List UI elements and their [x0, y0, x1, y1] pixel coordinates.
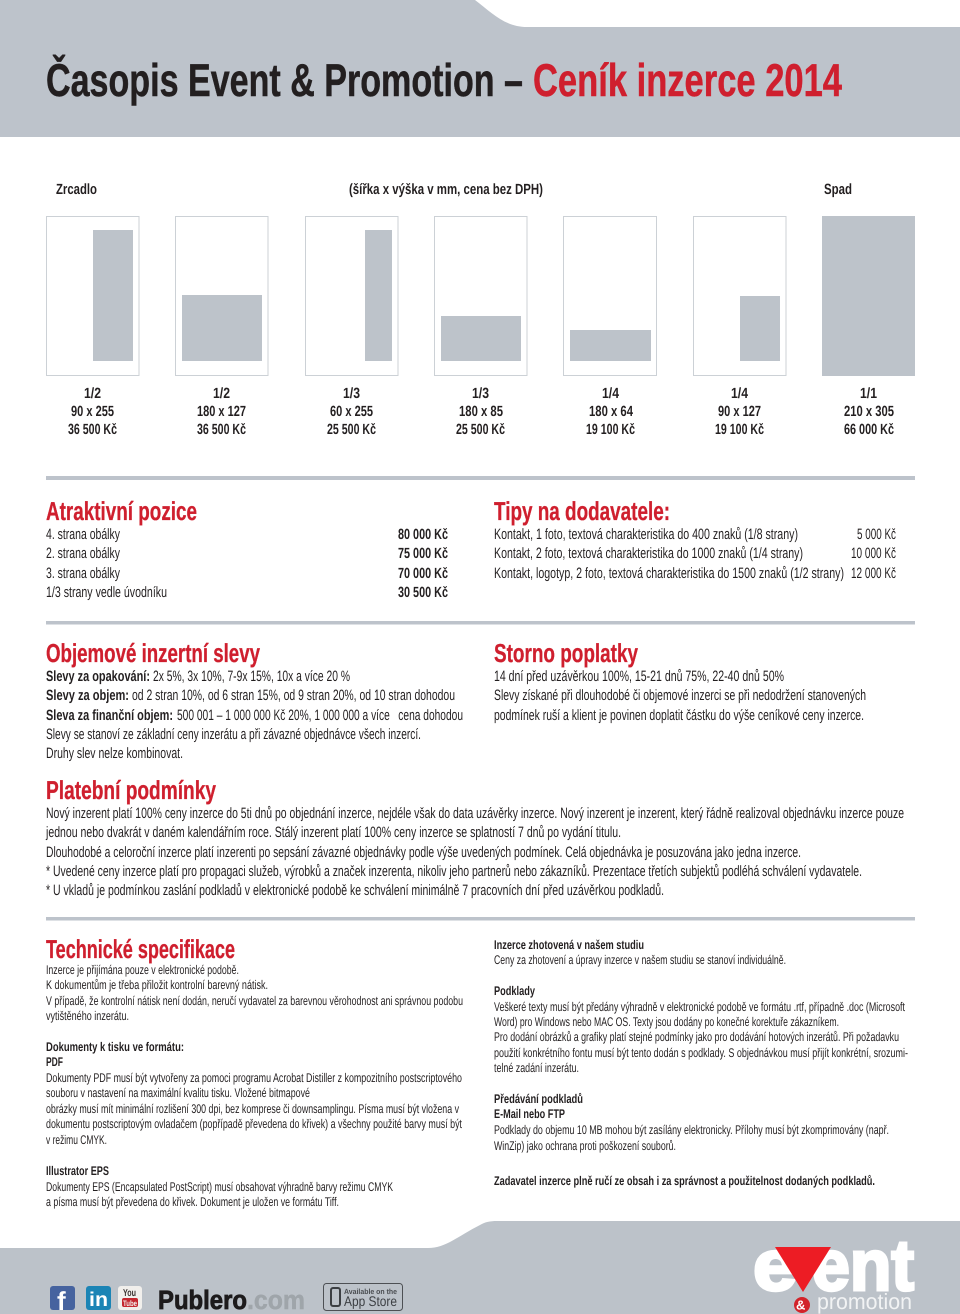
ad format 1/2 180x127 — [176, 216, 268, 438]
ad format 1/4 180x64: 180 x 64 — [589, 404, 634, 420]
logo: event & promotion — [753, 1226, 914, 1314]
panel: studio and materials — [494, 938, 908, 1188]
panel: technical specifications: v režimu CMYK. — [46, 1133, 107, 1147]
panel: studio and materials: WinZip) jako ochrana proti poškození souborů. — [494, 1139, 676, 1153]
logo: event & promotion: promotion — [817, 1289, 912, 1314]
panel: supplier tips: 5 000 Kč — [857, 526, 896, 543]
ad format 1/4 90x127: 90 x 127 — [718, 404, 761, 420]
panel: payment terms: Platební podmínky — [46, 775, 216, 805]
panel: payment terms — [45, 775, 904, 899]
icon: youtube — [118, 1286, 142, 1310]
panel: supplier tips: Kontakt, 1 foto, textová charakteristika do 400 znaků (1/8 strany) — [494, 526, 798, 543]
badge: App Store — [324, 1284, 402, 1310]
panel: technical specifications: Inzerce je přijímána pouze v elektronické podobě. — [46, 963, 239, 977]
panel: attractive positions: 1/3 strany vedle úvodníku — [46, 584, 167, 601]
ad format 1/2 90x255: 1/2 — [84, 386, 101, 402]
panel: supplier tips — [494, 496, 896, 582]
ad format 1/3 60x255: 1/3 — [343, 386, 360, 402]
ad format 1/3 180x85: 1/3 — [472, 386, 489, 402]
panel: technical specifications: K dokumentům je třeba přiložit kontrolní barevný nátisk. — [46, 978, 268, 992]
panel: technical specifications: V případě, že kontrolní nátisk není dodán, neručí vydavatel za barevnou věrohodnost ani správnou podobu — [46, 994, 463, 1008]
panel: technical specifications: Dokumenty EPS (Encapsulated PostScript) musí obsahovat výhradně barvy režimu CMYK — [46, 1180, 393, 1194]
ad format 1/3 60x255: 25 500 Kč — [327, 422, 376, 438]
ad format 1/1 210x305: 66 000 Kč — [844, 422, 894, 438]
panel: attractive positions: 3. strana obálky — [46, 565, 120, 582]
panel: studio and materials: Podklady — [494, 984, 535, 998]
panel: technical specifications: dokumentu postscriptovým ovladačem (popřípadě převedena do křivek) a všechny použité barvy musí být — [46, 1117, 462, 1131]
ad format 1/2 180x127: 36 500 Kč — [197, 422, 246, 438]
panel: supplier tips: Tipy na dodavatele: — [494, 496, 670, 526]
panel: volume discounts: Druhy slev nelze kombinovat. — [46, 745, 183, 762]
ad format 1/4 180x64 — [564, 216, 656, 438]
panel: volume discounts: Objemové inzertní slevy — [46, 638, 260, 668]
panel: volume discounts: 2x 5%, 3x 10%, 7-9x 15%, 10x a více 20 % — [153, 668, 350, 685]
panel: volume discounts: 500 001 – 1 000 000 Kč 20%, 1 000 000 a více cena dohodou — [177, 707, 463, 724]
panel: technical specifications: Dokumenty PDF musí být vytvořeny za pomoci programu Acrobat Distiller z kompozitního postscriptového — [46, 1071, 462, 1085]
column captions — [56, 182, 852, 198]
title: Ceník inzerce 2014 — [533, 54, 842, 106]
panel: attractive positions: 30 500 Kč — [398, 585, 448, 601]
badge: App Store: Available on the — [344, 1287, 397, 1296]
ad format 1/2 180x127: 1/2 — [213, 386, 230, 402]
ad format 1/3 180x85: 25 500 Kč — [456, 422, 505, 438]
panel: payment terms: * U vkladů je podmínkou zaslání podkladů v elektronické podobě ke schválení minimálně 7 pracovních dní před uzávěrkou podkladů. — [46, 882, 664, 899]
panel: attractive positions: Atraktivní pozice — [46, 496, 197, 526]
ad format 1/3 60x255 — [306, 216, 398, 438]
panel: supplier tips: 12 000 Kč — [851, 565, 896, 582]
panel: attractive positions: 2. strana obálky — [46, 545, 120, 562]
ad format 1/4 90x127: 1/4 — [731, 386, 749, 402]
ad format 1/1 210x305: 1/1 — [860, 386, 877, 402]
title: Časopis Event & Promotion – — [46, 54, 523, 106]
panel: volume discounts: Sleva za finanční objem: — [46, 708, 173, 724]
panel: volume discounts: Slevy za opakování: — [46, 669, 150, 685]
panel: technical specifications: Technické specifikace — [46, 934, 235, 964]
icon: linkedin — [86, 1286, 111, 1311]
panel: technical specifications: obrázky musí mít minimální rozlišení 300 dpi, bez komprese či downsamplingu. Písma musí být vložena v — [46, 1102, 459, 1116]
panel: volume discounts — [46, 638, 463, 762]
logo: Publero.com — [158, 1285, 305, 1314]
ad format 1/2 90x255: 90 x 255 — [71, 404, 114, 420]
column captions: Spad — [824, 182, 852, 198]
ad format 1/3 180x85: 180 x 85 — [459, 404, 503, 420]
ad format 1/3 60x255: 60 x 255 — [330, 404, 373, 420]
panel: technical specifications: a písma musí být převedena do křivek. Dokument je uložen ve formátu Tiff. — [46, 1195, 339, 1209]
panel: volume discounts: od 2 stran 10%, od 6 stran 15%, od 9 stran 20%, od 10 stran dohodou — [132, 687, 455, 704]
icon: linkedin: in — [89, 1289, 108, 1311]
panel: attractive positions: 75 000 Kč — [398, 546, 448, 562]
panel: attractive positions — [46, 496, 448, 601]
panel: studio and materials: Ceny za zhotovení a úpravy inzerce v našem studiu se stanoví individuálně. — [494, 953, 786, 967]
ad format 1/1 210x305 — [822, 216, 915, 438]
logo: event & promotion: e — [753, 1226, 797, 1306]
panel: technical specifications: vytištěného inzerátu. — [46, 1009, 129, 1023]
panel: technical specifications: Illustrator EPS — [46, 1164, 109, 1178]
panel: studio and materials: telné zadání inzerátu. — [494, 1061, 579, 1075]
ad format 1/4 180x64: 19 100 Kč — [586, 422, 635, 438]
panel: studio and materials: Předávání podkladů — [494, 1092, 583, 1106]
icon: youtube: Tube — [123, 1299, 137, 1308]
icon: youtube: You — [123, 1288, 136, 1299]
column captions: (šířka x výška v mm, cena bez DPH) — [349, 182, 543, 198]
ad format 1/3 180x85 — [434, 216, 527, 438]
panel: supplier tips: Kontakt, 2 foto, textová charakteristika do 1000 znaků (1/4 strany) — [494, 545, 803, 562]
panel: studio and materials: E-Mail nebo FTP — [494, 1107, 565, 1121]
ad format 1/2 180x127: 180 x 127 — [197, 404, 246, 420]
panel: technical specifications: Dokumenty k tisku ve formátu: — [46, 1040, 184, 1054]
panel: payment terms: jednou nebo dvakrát v daném kalendářním roce. Stálý inzerent platí 100% ceny inzerce se splatností 7 dnů po vydání titulu. — [45, 824, 621, 841]
panel: volume discounts: Slevy za objem: — [46, 688, 129, 704]
panel: studio and materials: Inzerce zhotovená v našem studiu — [494, 938, 644, 952]
panel: technical specifications — [46, 934, 463, 1209]
panel: cancellation fees — [494, 638, 866, 724]
header band — [0, 0, 960, 137]
ad format 1/2 90x255: 36 500 Kč — [68, 422, 117, 438]
panel: cancellation fees: Storno poplatky — [494, 638, 638, 668]
logo: event & promotion: ent — [812, 1226, 914, 1306]
ad format 1/1 210x305: 210 x 305 — [844, 404, 894, 420]
panel: technical specifications: souboru v nastavení na maximální kvalitu tisku. Vložené bitmapové — [46, 1086, 310, 1100]
panel: technical specifications: PDF — [46, 1055, 63, 1069]
panel: cancellation fees: 14 dní před uzávěrkou 100%, 15-21 dnů 75%, 22-40 dnů 50% — [494, 668, 784, 685]
footer band — [0, 1221, 960, 1314]
ad format 1/4 90x127 — [694, 216, 786, 438]
badge: App Store: App Store — [344, 1293, 397, 1309]
column captions: Zrcadlo — [56, 182, 97, 198]
panel: volume discounts: Slevy se stanoví ze základní ceny inzerátu a při závazné objednávce všech inzercí. — [46, 726, 421, 743]
ad format 1/4 180x64: 1/4 — [602, 386, 620, 402]
panel: supplier tips: 10 000 Kč — [851, 545, 896, 562]
ad format 1/2 90x255 — [46, 216, 139, 438]
icon: facebook — [50, 1286, 75, 1314]
logo: event & promotion: & — [796, 1298, 805, 1312]
panel: attractive positions: 80 000 Kč — [398, 527, 448, 543]
panel: attractive positions: 70 000 Kč — [398, 566, 448, 582]
panel: attractive positions: 4. strana obálky — [46, 526, 120, 543]
ad format 1/4 90x127: 19 100 Kč — [715, 422, 764, 438]
